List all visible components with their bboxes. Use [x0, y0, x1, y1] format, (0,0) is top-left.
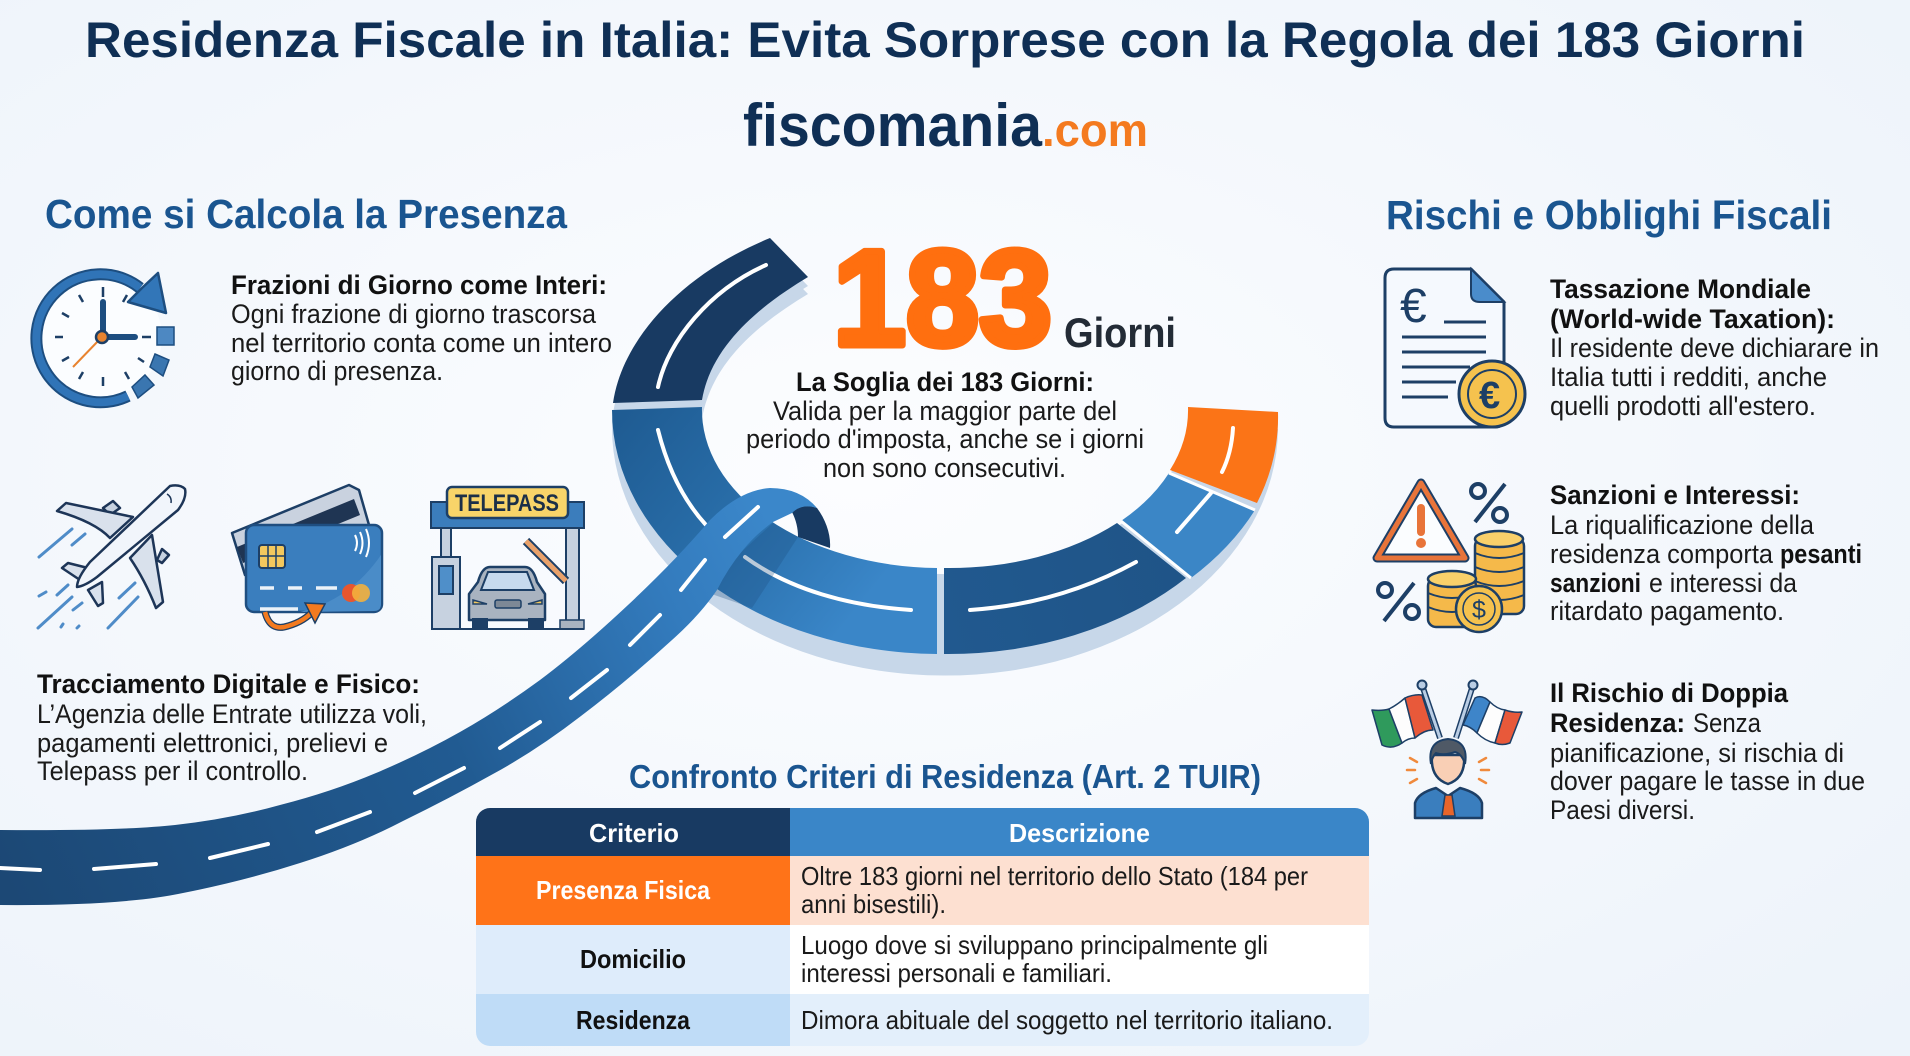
text: tassazione mondiale	[1550, 274, 1879, 421]
text: sanzioni e interessi: residenza comporta	[1550, 539, 1774, 569]
text: tassazione mondiale: Tassazione Mondiale	[1550, 274, 1811, 304]
big number 183 giorni: Giorni	[1064, 309, 1176, 356]
heading: come si calcola la presenza: Come si Calcola la Presenza	[45, 191, 568, 237]
icon: clock	[36, 273, 174, 402]
text: tassazione mondiale: (World-wide Taxation):	[1550, 304, 1835, 334]
text: frazioni di giorno	[231, 270, 612, 386]
row: domicilio: interessi personali e familiari.	[801, 958, 1112, 988]
text: sanzioni e interessi: sanzioni	[1550, 568, 1641, 598]
icon: tax document with euro coin: €	[1400, 280, 1427, 333]
circular road track	[612, 238, 1278, 676]
icon: warning, percentages and coins: $	[1472, 596, 1486, 624]
text: rischio di doppia residenza: pianificazione, si rischia di	[1550, 738, 1844, 768]
icon: airplane	[38, 485, 185, 628]
text: frazioni di giorno: giorno di presenza.	[231, 356, 443, 386]
text: tassazione mondiale: Il residente deve dichiarare in	[1550, 333, 1879, 363]
road segment: blue	[612, 407, 937, 654]
road with loop	[0, 488, 830, 905]
text: tracciamento digitale e fisico: pagamenti elettronici, prelievi e	[37, 728, 388, 758]
text: la soglia dei 183 giorni: La Soglia dei 183 Giorni:	[796, 367, 1094, 397]
text: la soglia dei 183 giorni	[746, 367, 1144, 483]
icon: telepass toll gate: TELEPASS	[455, 490, 559, 517]
text: tassazione mondiale: quelli prodotti all'estero.	[1550, 391, 1816, 421]
text: tracciamento digitale e fisico	[37, 669, 427, 786]
row: presenza fisica: Presenza Fisica	[536, 875, 710, 905]
text: la soglia dei 183 giorni: periodo d'imposta, anche se i giorni	[746, 424, 1144, 454]
text: rischio di doppia residenza: Il Rischio di Doppia	[1550, 678, 1789, 708]
heading: rischi e obblighi fiscali: Rischi e Obblighi Fiscali	[1386, 192, 1832, 238]
text: rischio di doppia residenza: Paesi diversi.	[1550, 795, 1695, 825]
icon: warning, percentages and coins	[1377, 483, 1524, 632]
table header: Criterio	[589, 818, 679, 848]
road segment: orange	[1170, 407, 1278, 503]
row: domicilio: Luogo dove si sviluppano principalmente gli	[801, 930, 1268, 960]
row: domicilio: Domicilio	[580, 944, 686, 974]
text: frazioni di giorno: nel territorio conta come un intero	[231, 328, 612, 358]
text: sanzioni e interessi: ritardato pagamento.	[1550, 596, 1784, 626]
title: Residenza Fiscale in Italia: Evita Sorprese con la Regola dei 183 Giorni	[85, 12, 1805, 68]
row: residenza	[576, 1005, 1333, 1035]
text: rischio di doppia residenza	[1550, 678, 1865, 825]
big number 183 giorni	[833, 222, 1176, 374]
logo: fiscomania.com: .com	[1042, 104, 1148, 156]
comparison table	[476, 808, 1369, 1046]
icon: credit cards	[232, 485, 382, 627]
table header: Descrizione	[1009, 818, 1150, 848]
row: residenza: Residenza	[576, 1005, 690, 1035]
text: frazioni di giorno: Frazioni di Giorno come Interi:	[231, 270, 607, 300]
big number 183 giorni: 183	[833, 222, 1052, 374]
table title: Confronto Criteri di Residenza (Art. 2 TUIR)	[629, 758, 1261, 795]
text: rischio di doppia residenza: Senza	[1693, 708, 1762, 738]
row: domicilio	[580, 930, 1268, 988]
table header	[589, 818, 1150, 848]
road segment: navy	[613, 238, 808, 403]
text: la soglia dei 183 giorni: non sono consecutivi.	[823, 453, 1066, 483]
text: sanzioni e interessi: La riqualificazione della	[1550, 510, 1815, 540]
road segment: dark blue	[944, 523, 1186, 654]
row: presenza fisica: anni bisestili).	[801, 889, 946, 919]
text: sanzioni e interessi: Sanzioni e Interessi:	[1550, 480, 1800, 510]
text: frazioni di giorno: Ogni frazione di giorno trascorsa	[231, 299, 597, 329]
text: sanzioni e interessi	[1550, 480, 1862, 626]
text: tracciamento digitale e fisico: L’Agenzia delle Entrate utilizza voli,	[37, 699, 427, 729]
text: sanzioni e interessi: e interessi da	[1649, 568, 1798, 598]
icon: person with two flags	[1372, 680, 1522, 818]
road segment: light blue	[1121, 473, 1255, 578]
text: tracciamento digitale e fisico: Telepass per il controllo.	[37, 756, 308, 786]
text: tassazione mondiale: Italia tutti i redditi, anche	[1550, 362, 1827, 392]
logo: fiscomania.com: fiscomania	[743, 92, 1043, 159]
text: tracciamento digitale e fisico: Tracciamento Digitale e Fisico:	[37, 669, 420, 699]
row: presenza fisica: Oltre 183 giorni nel territorio dello Stato (184 per	[801, 861, 1308, 891]
icon: tax document with euro coin	[1385, 269, 1525, 427]
row: residenza: Dimora abituale del soggetto nel territorio italiano.	[801, 1005, 1333, 1035]
text: rischio di doppia residenza: dover pagare le tasse in due	[1550, 766, 1865, 796]
row: presenza fisica	[536, 861, 1308, 919]
icon: telepass toll gate	[431, 487, 584, 629]
text: la soglia dei 183 giorni: Valida per la maggior parte del	[773, 396, 1117, 426]
text: sanzioni e interessi: pesanti	[1780, 539, 1862, 569]
icon: tax document with euro coin: €	[1479, 375, 1500, 417]
text: rischio di doppia residenza: Residenza:	[1550, 708, 1685, 738]
